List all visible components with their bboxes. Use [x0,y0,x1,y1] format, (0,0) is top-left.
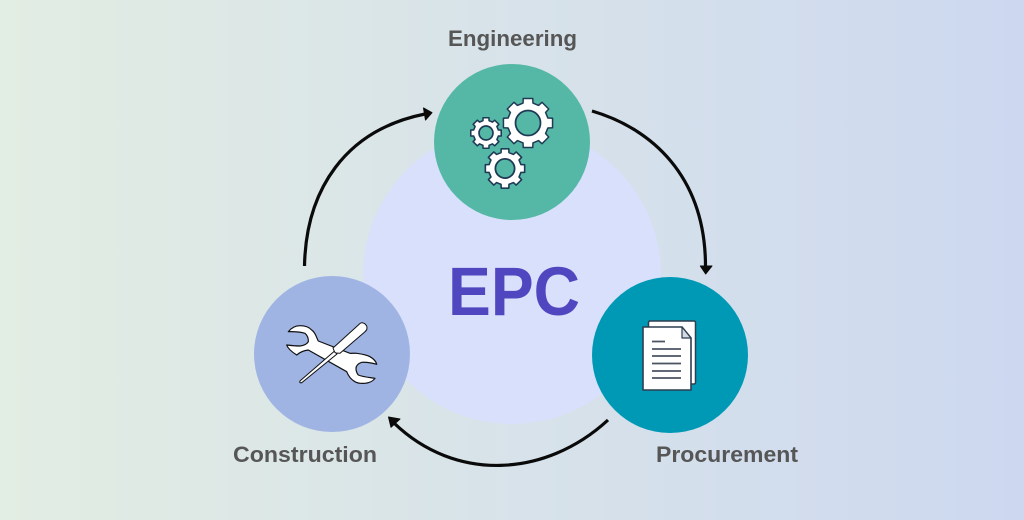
icon: wrench and screwdriver [287,323,377,383]
panel: construction node [254,276,410,432]
arrow: construction to engineering [304,108,432,266]
heading: Procurement: Procurement [656,442,799,467]
arrow: procurement to construction [388,417,608,465]
icon: gears [471,98,553,188]
central circle [363,126,661,424]
EPC heading: EPC [448,253,580,330]
arrow: engineering to procurement [592,111,712,274]
panel: engineering node [434,64,590,220]
heading: Construction: Construction [233,442,377,467]
panel: procurement node [592,277,748,433]
heading: Engineering: Engineering [448,26,577,51]
icon: documents [643,321,696,390]
